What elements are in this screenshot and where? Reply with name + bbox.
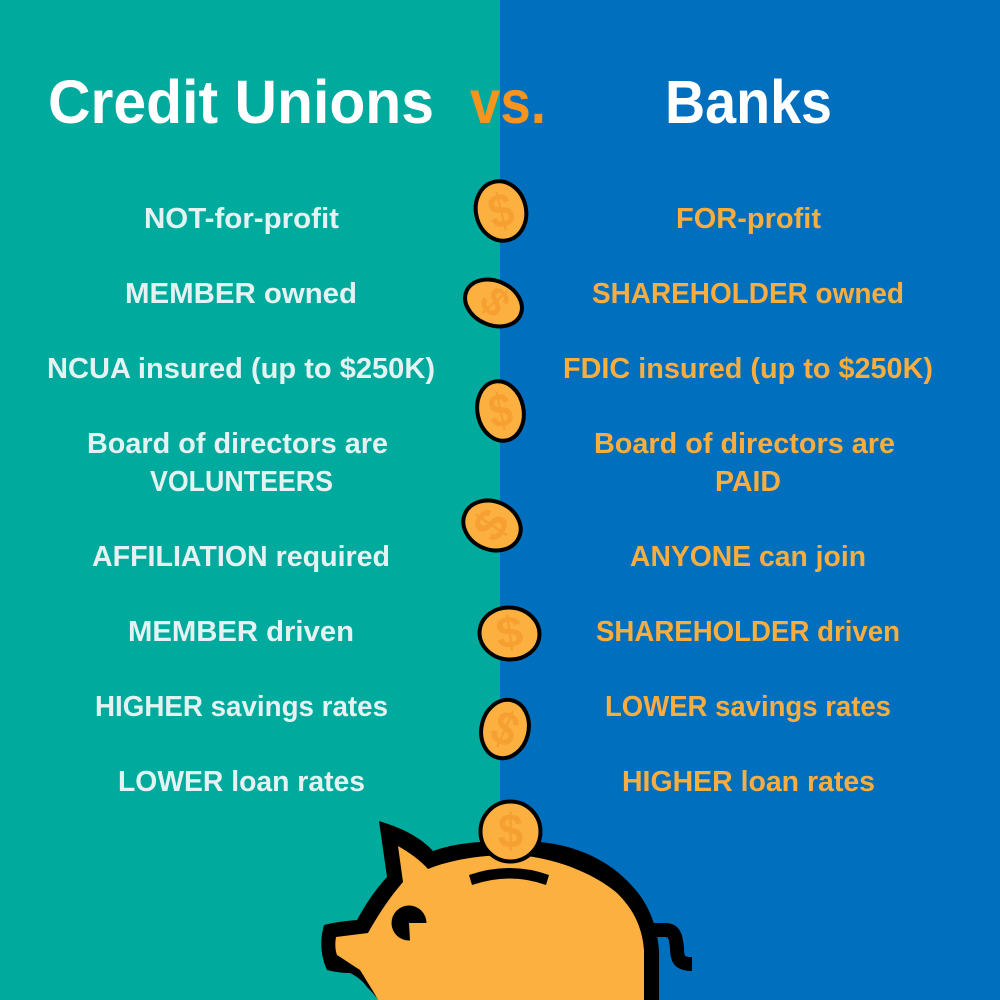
text list: bank attributes: PAID — [715, 466, 781, 498]
heading: Banks: Banks — [665, 68, 832, 136]
text list: bank attributes: SHAREHOLDER owned — [592, 278, 904, 310]
icon: coin entering piggy bank: $ — [498, 804, 523, 858]
text list: credit union attributes: AFFILIATION required — [92, 541, 390, 573]
panel: banks background — [500, 0, 1000, 1000]
pig tail — [652, 930, 692, 964]
text list: bank attributes: SHAREHOLDER driven — [596, 616, 900, 648]
text list: bank attributes — [563, 203, 933, 798]
icon: falling coin 5: $ — [493, 605, 526, 659]
text list: credit union attributes: LOWER loan rates — [118, 766, 365, 798]
heading: Credit Unions: Credit Unions — [48, 68, 434, 136]
text list: credit union attributes: NOT-for-profit — [144, 203, 340, 235]
text list: credit union attributes: HIGHER savings rates — [95, 691, 388, 723]
text list: credit union attributes: MEMBER driven — [128, 616, 354, 648]
panel: credit unions background — [0, 0, 500, 1000]
text list: credit union attributes: Board of directors are — [87, 428, 388, 460]
text list: bank attributes: ANYONE can join — [630, 541, 866, 573]
icon: falling coin 1: $ — [483, 182, 519, 240]
icon: falling coin 1 — [469, 176, 533, 246]
text list: credit union attributes: MEMBER owned — [125, 278, 357, 310]
text list: bank attributes: FDIC insured (up to $250K) — [563, 353, 933, 385]
icon: piggy bank — [321, 821, 692, 1000]
icon: coin entering piggy bank — [480, 802, 540, 862]
pig outline — [321, 821, 659, 1000]
text list: credit union attributes: VOLUNTEERS — [150, 466, 333, 498]
icon: falling coin 6: $ — [483, 699, 527, 758]
text list: credit union attributes: NCUA insured (up to $250K) — [47, 353, 435, 385]
text list: bank attributes: LOWER savings rates — [605, 691, 891, 723]
pig body — [335, 846, 644, 1000]
icon: falling coin 3 — [472, 377, 529, 445]
icon: falling coin 5 — [477, 602, 542, 662]
icon: falling coin 3: $ — [484, 383, 517, 440]
icon: falling coin 2 — [457, 266, 532, 337]
icon: falling coin 4: $ — [462, 500, 519, 550]
text list: credit union attributes — [47, 203, 435, 798]
pig eye — [392, 906, 426, 941]
icon: falling coin 2: $ — [470, 278, 520, 326]
icon: falling coin 6 — [475, 695, 535, 763]
text list: bank attributes: Board of directors are — [594, 428, 895, 460]
icon: falling coin 4 — [455, 492, 529, 559]
heading: vs.: vs. — [470, 68, 546, 136]
text list: bank attributes: FOR-profit — [676, 203, 822, 235]
text list: bank attributes: HIGHER loan rates — [622, 766, 875, 798]
pig coin slot — [469, 868, 549, 885]
